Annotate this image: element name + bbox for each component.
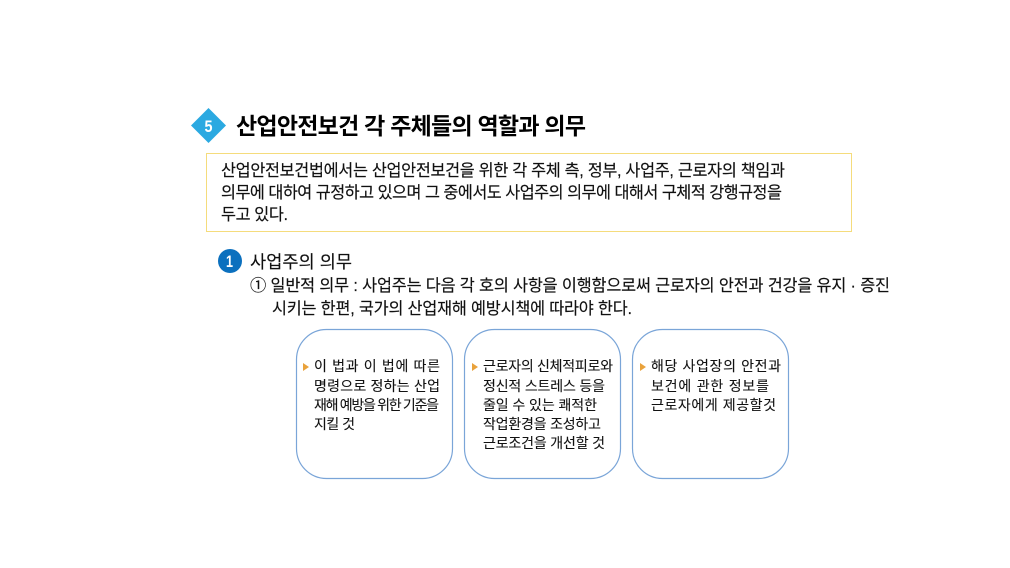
panel: duty card 3: 해당 사업장의 안전과 (651, 358, 781, 374)
title: 산업안전보건 각 주체들의 역할과 의무 (236, 113, 586, 139)
panel: duty card 3: 근로자에게 제공할것 (651, 397, 776, 413)
panel: introduction: 산업안전보건법에서는 산업안전보건을 위한 각 주체 측, 정부, 사업주, 근로자의 책임과 (221, 162, 785, 180)
text block: general duty: ① 일반적 의무 : 사업주는 다음 각 호의 사항을 이행함으로써 근로자의 안전과 건강을 유지 · 증진 (250, 277, 890, 295)
panel: duty card 1: 재해 예방을 위한 기준을 (314, 397, 439, 413)
icon: section number diamond (191, 108, 226, 143)
panel: introduction (206, 154, 852, 232)
panel: duty card 2: 줄일 수 있는 쾌적한 (483, 397, 597, 413)
text block: general duty (250, 277, 890, 318)
icon: section number diamond: 5 (204, 117, 212, 136)
panel: duty card 2: 근로자의 신체적피로와 (483, 358, 613, 374)
icon: subsection number circle (218, 249, 242, 273)
panel: duty card 1: 명령으로 정하는 산업 (314, 378, 440, 394)
panel: duty card 1: 지킬 것 (314, 416, 355, 432)
text block: general duty: 시키는 한편, 국가의 산업재해 예방시책에 따라야 한다. (272, 300, 632, 318)
icon: bullet triangle (303, 363, 309, 371)
panel: duty card 1 (296, 330, 452, 478)
icon: bullet triangle (640, 363, 646, 371)
panel: duty card 3 (632, 330, 788, 478)
icon: subsection number circle: 1 (226, 252, 233, 271)
panel: duty card 2 (464, 330, 620, 478)
panel: duty card 2: 정신적 스트레스 등을 (483, 378, 605, 394)
panel: duty card 2: 작업환경을 조성하고 (483, 416, 601, 432)
panel: duty card 3: 보건에 관한 정보를 (651, 378, 769, 394)
panel: duty card 1: 이 법과 이 법에 따른 (314, 358, 440, 374)
panel: introduction: 의무에 대하여 규정하고 있으며 그 중에서도 사업주의 의무에 대해서 구체적 강행규정을 (221, 184, 782, 202)
panel: duty card 2: 근로조건을 개선할 것 (483, 435, 605, 451)
icon: bullet triangle (472, 363, 478, 371)
panel: introduction: 두고 있다. (221, 206, 288, 224)
subheading: 사업주의 의무 (250, 252, 352, 272)
